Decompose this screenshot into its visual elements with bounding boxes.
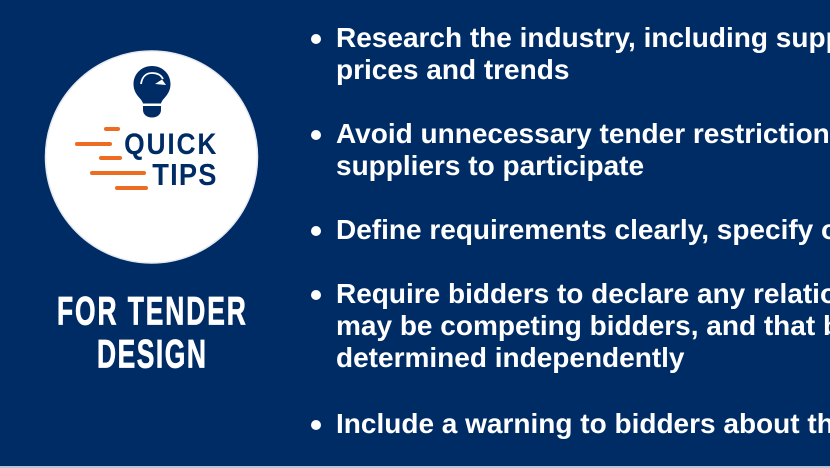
heading bbox=[57, 289, 246, 377]
heading line 2: DESIGN bbox=[97, 332, 206, 377]
badge circle bbox=[46, 51, 258, 263]
left badge and heading bbox=[44, 50, 258, 377]
badge text: quick: QUICK bbox=[124, 126, 217, 160]
tip 1 bbox=[311, 22, 830, 85]
heading line 1: FOR TENDER bbox=[57, 289, 246, 334]
tip 2 bbox=[311, 118, 830, 181]
badge text: tips: TIPS bbox=[152, 158, 216, 192]
tip 3: Define requirements clearly, specify o bbox=[336, 214, 830, 245]
tip 4 bbox=[311, 278, 830, 373]
tip 4: determined independently bbox=[336, 342, 684, 373]
speed lines bbox=[77, 129, 146, 188]
quick tips badge bbox=[46, 51, 258, 263]
tip 1: prices and trends bbox=[336, 54, 569, 85]
tip 2: suppliers to participate bbox=[336, 150, 644, 181]
icon: light bulb bbox=[134, 66, 170, 118]
